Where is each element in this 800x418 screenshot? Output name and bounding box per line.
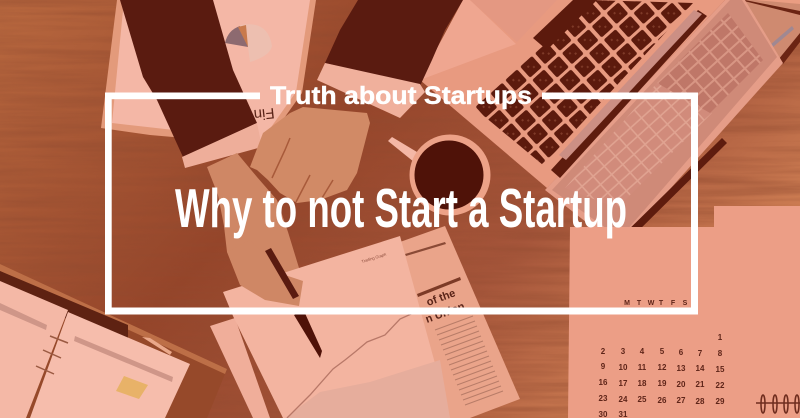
calendar dates: 6	[679, 348, 684, 357]
weekday header: W	[648, 300, 655, 307]
calendar dates: 25	[638, 395, 647, 404]
left shirt cuff	[182, 123, 262, 168]
calendar dates: 15	[716, 365, 725, 374]
left suit sleeve	[120, 0, 262, 168]
calendar dates: 21	[696, 380, 705, 389]
booklet rules	[405, 242, 446, 256]
calendar dates: 17	[619, 379, 628, 388]
calendar dates: 19	[658, 379, 667, 388]
planner in leather case	[0, 264, 227, 418]
calendar dates: 5	[660, 347, 665, 356]
calendar dates: 16	[599, 378, 608, 387]
white frame	[105, 92, 698, 314]
weekday header: S	[683, 300, 688, 307]
left hand with pen	[207, 153, 303, 306]
calendar dates: 10	[619, 363, 628, 372]
booklet heading: of the	[425, 287, 457, 309]
calendar dates: 13	[677, 364, 686, 373]
line chart	[285, 310, 450, 418]
weekday header: M	[624, 300, 630, 307]
hand fingers over paper	[227, 240, 303, 306]
calendar dates: 1	[718, 333, 723, 342]
hinge	[551, 10, 707, 178]
calendar dates: 11	[638, 363, 647, 372]
calendar dates: 12	[658, 363, 667, 372]
notebook and laptop	[420, 0, 725, 188]
calendar dates: 7	[698, 349, 703, 358]
trackpad	[470, 0, 557, 42]
laptop lid and screen	[545, 0, 783, 247]
weekday header: T	[659, 300, 664, 307]
subtitle: Truth about Startups	[270, 82, 532, 110]
on-screen keyboard upper	[657, 13, 763, 113]
wall calendar	[568, 206, 800, 418]
booklet: n Union	[424, 300, 467, 326]
tablet with document	[740, 0, 800, 65]
right suit sleeve	[317, 0, 463, 118]
calendar dates	[599, 333, 725, 418]
calendar dates: 28	[696, 397, 705, 406]
laptop base	[420, 0, 725, 188]
upside-down heading on clipboard: Fin	[253, 104, 275, 123]
calendar dates: 23	[599, 394, 608, 403]
calendar dates: 24	[619, 395, 628, 404]
calendar dates: 4	[640, 347, 645, 356]
calendar dates: 3	[621, 347, 626, 356]
planner left page	[0, 281, 68, 418]
planner rings	[36, 336, 68, 374]
coffee cup	[388, 134, 490, 216]
calendar dates: 20	[677, 380, 686, 389]
trading graph paper	[223, 236, 450, 418]
weekday header: T	[637, 300, 642, 307]
chart heading: Trading Graph	[361, 252, 387, 264]
right hand	[250, 107, 370, 203]
pen	[265, 248, 322, 358]
sticky note	[116, 376, 148, 399]
calendar dates: 2	[601, 347, 606, 356]
booklet body text	[435, 316, 503, 405]
calendar dates: 14	[696, 364, 705, 373]
calendar dates: 27	[677, 396, 686, 405]
calendar dates: 9	[601, 362, 606, 371]
weekday header	[624, 300, 688, 307]
calendar dates: 18	[638, 379, 647, 388]
notebook	[420, 0, 516, 80]
pie chart	[225, 24, 272, 62]
calendar dates: 29	[716, 397, 725, 406]
spiral binding	[756, 395, 800, 413]
planner right page	[30, 312, 190, 418]
weekday header: F	[671, 300, 676, 307]
calendar dates: 22	[716, 381, 725, 390]
on-screen keyboard lower	[565, 83, 712, 208]
calendar dates: 8	[718, 349, 723, 358]
clipboard with pie chart	[101, 0, 316, 145]
right shirt cuff	[317, 63, 425, 118]
hands	[207, 107, 370, 306]
calendar dates: 26	[658, 396, 667, 405]
booklet	[210, 226, 520, 418]
